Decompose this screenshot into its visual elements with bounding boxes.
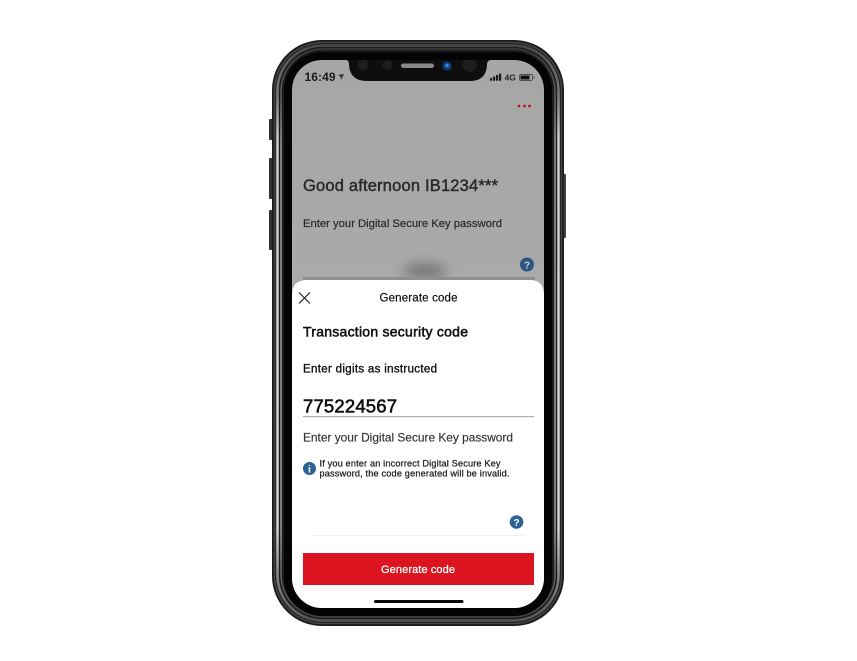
side buttons <box>269 119 566 250</box>
info icon <box>303 462 316 476</box>
status icons: 4G <box>504 72 516 82</box>
info note: password, the code generated will be invalid. <box>320 468 510 478</box>
phone <box>269 40 566 626</box>
help icon: sheet <box>510 515 523 529</box>
status icons <box>490 74 534 81</box>
close icon <box>299 292 310 304</box>
help icon: background: ? <box>524 260 530 272</box>
password prompt: Enter your Digital Secure Key password <box>303 218 502 230</box>
greeting: Good afternoon IB1234*** <box>303 177 499 195</box>
home indicator <box>374 600 464 603</box>
bottom sheet <box>292 280 544 608</box>
info note: If you enter an incorrect Digital Secure Key <box>320 458 501 468</box>
generate code button <box>303 553 534 585</box>
screen <box>292 58 544 608</box>
notch <box>346 58 491 81</box>
help icon: sheet: ? <box>513 518 520 529</box>
status time: 16:49 <box>304 70 336 84</box>
generate code button: Generate code <box>381 564 455 576</box>
blurred background content <box>403 263 447 279</box>
info icon: i <box>308 464 311 476</box>
instruction: Enter digits as instructed <box>303 364 437 376</box>
menu dots <box>518 105 531 107</box>
help icon: background <box>520 258 534 272</box>
password label: Enter your Digital Secure Key password <box>303 430 513 444</box>
location arrow <box>338 74 344 80</box>
phone frame <box>272 40 564 626</box>
code value: 775224567 <box>303 396 397 416</box>
heading: Transaction security code <box>303 324 468 340</box>
info note <box>320 458 510 478</box>
sheet title: Generate code <box>380 292 458 304</box>
